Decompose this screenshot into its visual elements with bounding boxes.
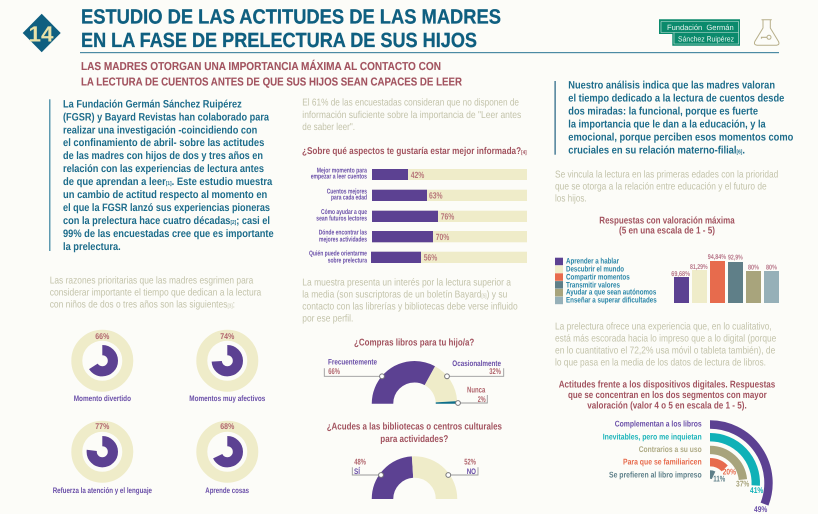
bar row: quién puede orientarme 56%: sobre prelectura: [328, 256, 367, 264]
heading: acudes a las bibliotecas: [327, 422, 502, 445]
text: la muestra presenta: la media (son suscriptoras de un boletín Bayard[5]) y su: [302, 290, 507, 301]
bar row: dónde encontrar 70%: [319, 229, 527, 243]
donut chart: momentos muy afectivos 74%: Momentos muy afectivos: [189, 394, 266, 403]
text: se vincula la lectura: los hijos.: [555, 194, 587, 205]
bar chart: aspectos: [309, 167, 527, 264]
bar row: quién puede orientarme 56%: 56%: [424, 252, 437, 262]
radial bar chart: dispositivos digitales: 20%: [723, 467, 736, 477]
donut chart: aprende cosas 68%: [202, 421, 253, 495]
heading: actitudes frente a los dispositivos: Actitudes frente a los dispositivos digitales. Respuestas: [559, 380, 776, 391]
heading: bar chart question: ¿Sobre qué aspectos te gustaría estar mejor informada?[4]: [302, 146, 527, 157]
gauge chart: compras libros: 32%: [489, 366, 501, 376]
donut chart: aprende cosas 68%: Aprende cosas: [205, 486, 249, 495]
bar row: dónde encontrar 70%: mejores actividades: [319, 235, 367, 243]
panel: nuestro análisis: Nuestro análisis indica que las madres valoran: [568, 80, 775, 92]
legend: respuestas: Compartir momentos: [566, 272, 630, 281]
bar row: cómo ayudar 76%: 76%: [441, 212, 454, 222]
panel: intro text: la prelectura.: [63, 241, 121, 253]
text: el 61% de las encuestadas: de saber leer".: [302, 122, 355, 133]
radial bar chart: dispositivos digitales: [603, 419, 768, 514]
radial bar chart: dispositivos digitales: Contrarios a su uso: [639, 444, 702, 454]
text: razones prioritarias: con niños de dos o tres años son las siguientes[3]:: [50, 300, 235, 311]
bar row: mejor momento 42%: 42%: [411, 170, 424, 180]
radial bar chart: dispositivos digitales: Complementan a los libros: [615, 419, 702, 429]
logo: Fundación Germán Sánchez Ruipérez: Sánchez Ruipérez: [678, 35, 734, 44]
column chart: valoración máxima: 92,9%: [728, 255, 743, 262]
text: el 61% de las encuestadas: [302, 98, 521, 133]
gauge chart: compras libros: Ocasionalmente: [452, 359, 501, 368]
heading: respuestas con valoración máxima: [599, 216, 735, 237]
panel: nuestro análisis: cruciales en su relación materno-filial[6].: [568, 145, 745, 157]
gauge chart: bibliotecas: SÍ: [354, 466, 361, 476]
donut chart: aprende cosas 68%: 68%: [220, 421, 235, 431]
bar row: quién puede orientarme 56%: [309, 250, 527, 264]
text: el 61% de las encuestadas: El 61% de las encuestadas consideran que no disponen de: [302, 98, 519, 109]
legend: respuestas: Descubrir el mundo: [566, 265, 624, 274]
text: la prelectura ofrece: [555, 322, 777, 368]
heading: actitudes frente a los dispositivos: [559, 380, 776, 411]
gauge chart: compras libros: [324, 358, 504, 405]
heading: actitudes frente a los dispositivos: valoración (valor 4 o 5 en escala de 1 - 5).: [587, 400, 747, 411]
title: [81, 6, 501, 52]
panel: intro text: de las madres con hijos de dos y tres años en: [63, 150, 263, 162]
donut chart: momentos muy afectivos 74%: [189, 331, 266, 403]
text: la muestra presenta: La muestra presenta un interés por la lectura superior a: [302, 277, 511, 288]
panel: nuestro análisis: [554, 80, 794, 157]
logo: Fundación Germán Sánchez Ruipérez: Fundación Germán: [667, 23, 734, 32]
donut chart: momento divertido 66%: 66%: [95, 331, 110, 341]
gauge chart: compras libros: Frecuentemente: [328, 358, 377, 367]
text: razones prioritarias: [50, 276, 262, 311]
bar row: dónde encontrar 70%: Dónde encontrar las: [319, 229, 367, 237]
gauge chart: compras libros: Nunca: [467, 385, 486, 395]
panel: nuestro análisis: dos miradas: la funcional, porque es fuerte: [568, 106, 758, 118]
panel: intro text: [49, 98, 274, 253]
bar row: cómo ayudar 76%: Cómo ayudar a que: [321, 208, 367, 216]
panel: intro text: realizar una investigación -coincidiendo con: [63, 124, 257, 136]
text: el 61% de las encuestadas: información suficiente sobre la importancia de "Leer antes: [302, 110, 521, 121]
text: razones prioritarias: considerar importante el tiempo que dedican a la lectura: [50, 288, 262, 299]
bar row: cuentos mejores 63%: para cada edad: [331, 194, 367, 202]
text: la prelectura ofrece: La prelectura ofrece una experiencia que, en lo cualitativo,: [555, 322, 772, 333]
radial bar chart: dispositivos digitales: 49%: [754, 504, 768, 514]
title: ESTUDIO DE LAS ACTITUDES DE LAS MADRES: [81, 6, 501, 28]
column chart: valoración máxima: 94,84%: [708, 254, 727, 261]
bar row: mejor momento 42%: [311, 167, 527, 181]
icon: flask with key: [754, 20, 779, 45]
text: la prelectura ofrece: está más escorada hacia lo impreso que a lo digital (porque: [555, 334, 777, 345]
radial bar chart: dispositivos digitales: Se prefieren al libro impreso: [609, 470, 702, 480]
legend: respuestas: Enseñar a superar dificultades: [566, 296, 657, 305]
gauge chart: compras libros: 66%: [328, 366, 340, 376]
column chart: valoración máxima: 81,29%: [690, 264, 708, 271]
panel: intro text: 99% de las encuestadas cree que es importante: [63, 228, 274, 240]
bar row: mejor momento 42%: Mejor momento para: [317, 167, 367, 175]
subtitle: LA LECTURA DE CUENTOS ANTES DE QUE SUS HIJOS SEAN CAPACES DE LEER: [81, 76, 463, 88]
radial bar chart: dispositivos digitales: Inevitables, pero me inquietan: [603, 432, 702, 442]
number badge: 14: [28, 22, 54, 46]
heading: respuestas con valoración máxima: (5 en una escala de 1 - 5): [619, 226, 715, 237]
heading: compras libros: ¿Compras libros para tu hijo/a?: [354, 338, 474, 349]
panel: intro text: con la prelectura hace cuatro décadas[2]; casi el: [63, 215, 270, 227]
panel: intro text: (FGSR) y Bayard Revistas han colaborado para: [63, 111, 270, 123]
text: razones prioritarias: Las razones prioritarias que las madres esgrimen para: [50, 276, 254, 287]
gauge chart: compras libros: 2%: [478, 394, 486, 404]
legend: respuestas: Transmitir valores: [566, 280, 620, 289]
text: la prelectura ofrece: lo que pasa en la media de los datos de lectura de libros.: [555, 358, 766, 368]
bar row: cuentos mejores 63%: Cuentos mejores: [327, 187, 367, 195]
gauge chart: bibliotecas: 48%: [354, 457, 366, 467]
text: se vincula la lectura: Se vincula la lectura en las primeras edades con la prioridad: [555, 170, 778, 181]
logo: Fundación Germán Sánchez Ruipérez: [659, 19, 740, 46]
radial bar chart: dispositivos digitales: 37%: [736, 479, 750, 489]
text: la muestra presenta: [302, 277, 518, 325]
column chart: valoración máxima: 80%: [766, 265, 778, 272]
radial bar chart: dispositivos digitales: Para que se familiaricen: [623, 457, 702, 467]
text: la muestra presenta: por ese perfil.: [302, 314, 353, 325]
column chart: valoración máxima: 80%: [748, 265, 760, 272]
heading: acudes a las bibliotecas: para actividades?: [380, 434, 448, 445]
column chart: valoración máxima: 69,68%: [671, 271, 691, 278]
donut chart: momento divertido 66%: [74, 331, 131, 403]
panel: nuestro análisis: la importancia que le dan a la educación, y la: [568, 119, 767, 131]
gauge chart: bibliotecas: [352, 457, 478, 499]
heading: acudes a las bibliotecas: ¿Acudes a las bibliotecas o centros culturales: [327, 422, 502, 433]
bar row: cuentos mejores 63%: [327, 187, 527, 202]
legend: respuestas: Aprender a hablar: [566, 257, 619, 266]
bar row: mejor momento 42%: empezar a leer cuentos: [311, 173, 367, 181]
gauge chart: bibliotecas: NO: [467, 467, 476, 476]
heading: actitudes frente a los dispositivos: que se concentran en los dos segmentos con mayor: [568, 390, 767, 401]
bar row: dónde encontrar 70%: 70%: [436, 232, 449, 242]
panel: intro text: relación con las experiencias de lectura antes: [63, 163, 264, 175]
subtitle: [81, 59, 463, 88]
panel: intro text: el que la FGSR lanzó sus experiencias pioneras: [63, 202, 270, 214]
radial bar chart: dispositivos digitales: 11%: [713, 474, 726, 484]
donut chart: refuerza la atención 77%: Refuerza la atención y el lenguaje: [53, 486, 152, 495]
title: EN LA FASE DE PRELECTURA DE SUS HIJOS: [81, 29, 477, 52]
donut chart: momentos muy afectivos 74%: 74%: [220, 331, 235, 341]
panel: intro text: de que aprendan a leer[1]. Este estudio muestra: [63, 176, 273, 188]
subtitle: LAS MADRES OTORGAN UNA IMPORTANCIA MÁXIMA AL CONTACTO CON: [81, 59, 441, 73]
panel: intro text: un cambio de actitud respecto al momento en: [63, 189, 267, 201]
panel: intro text: La Fundación Germán Sánchez Ruipérez: [63, 98, 242, 110]
panel: intro text: el confinamiento de abril- sobre las actitudes: [63, 137, 264, 149]
donut chart: momento divertido 66%: Momento divertido: [74, 394, 131, 403]
panel: nuestro análisis: el tiempo dedicado a la lectura de cuentos desde: [568, 93, 784, 105]
column chart: valoración máxima: [671, 254, 779, 303]
gauge chart: bibliotecas: 52%: [464, 457, 476, 467]
heading: respuestas con valoración máxima: Respuestas con valoración máxima: [599, 216, 735, 227]
text: la muestra presenta: contacto con las librerías y bibliotecas debe verse influido: [302, 302, 518, 313]
radial bar chart: dispositivos digitales: 41%: [750, 485, 764, 495]
legend: respuestas: Ayudar a que sean autónomos: [566, 288, 657, 297]
text: se vincula la lectura: [555, 170, 778, 205]
text: la prelectura ofrece: en lo cuantitativo el 72,2% usa móvil o tableta también), de: [555, 346, 776, 357]
number badge: [23, 14, 61, 52]
legend: respuestas: [555, 257, 657, 305]
bar row: cuentos mejores 63%: 63%: [429, 190, 443, 200]
donut chart: refuerza la atención 77%: [53, 421, 152, 495]
bar row: cómo ayudar 76%: [316, 208, 527, 223]
bar row: cómo ayudar 76%: sean futuros lectores: [316, 215, 367, 223]
bar row: quién puede orientarme 56%: Quién puede orientarme: [309, 250, 367, 258]
donut chart: refuerza la atención 77%: 77%: [95, 421, 110, 431]
text: se vincula la lectura: que se otorga a la relación entre educación y el futuro de: [555, 182, 767, 193]
